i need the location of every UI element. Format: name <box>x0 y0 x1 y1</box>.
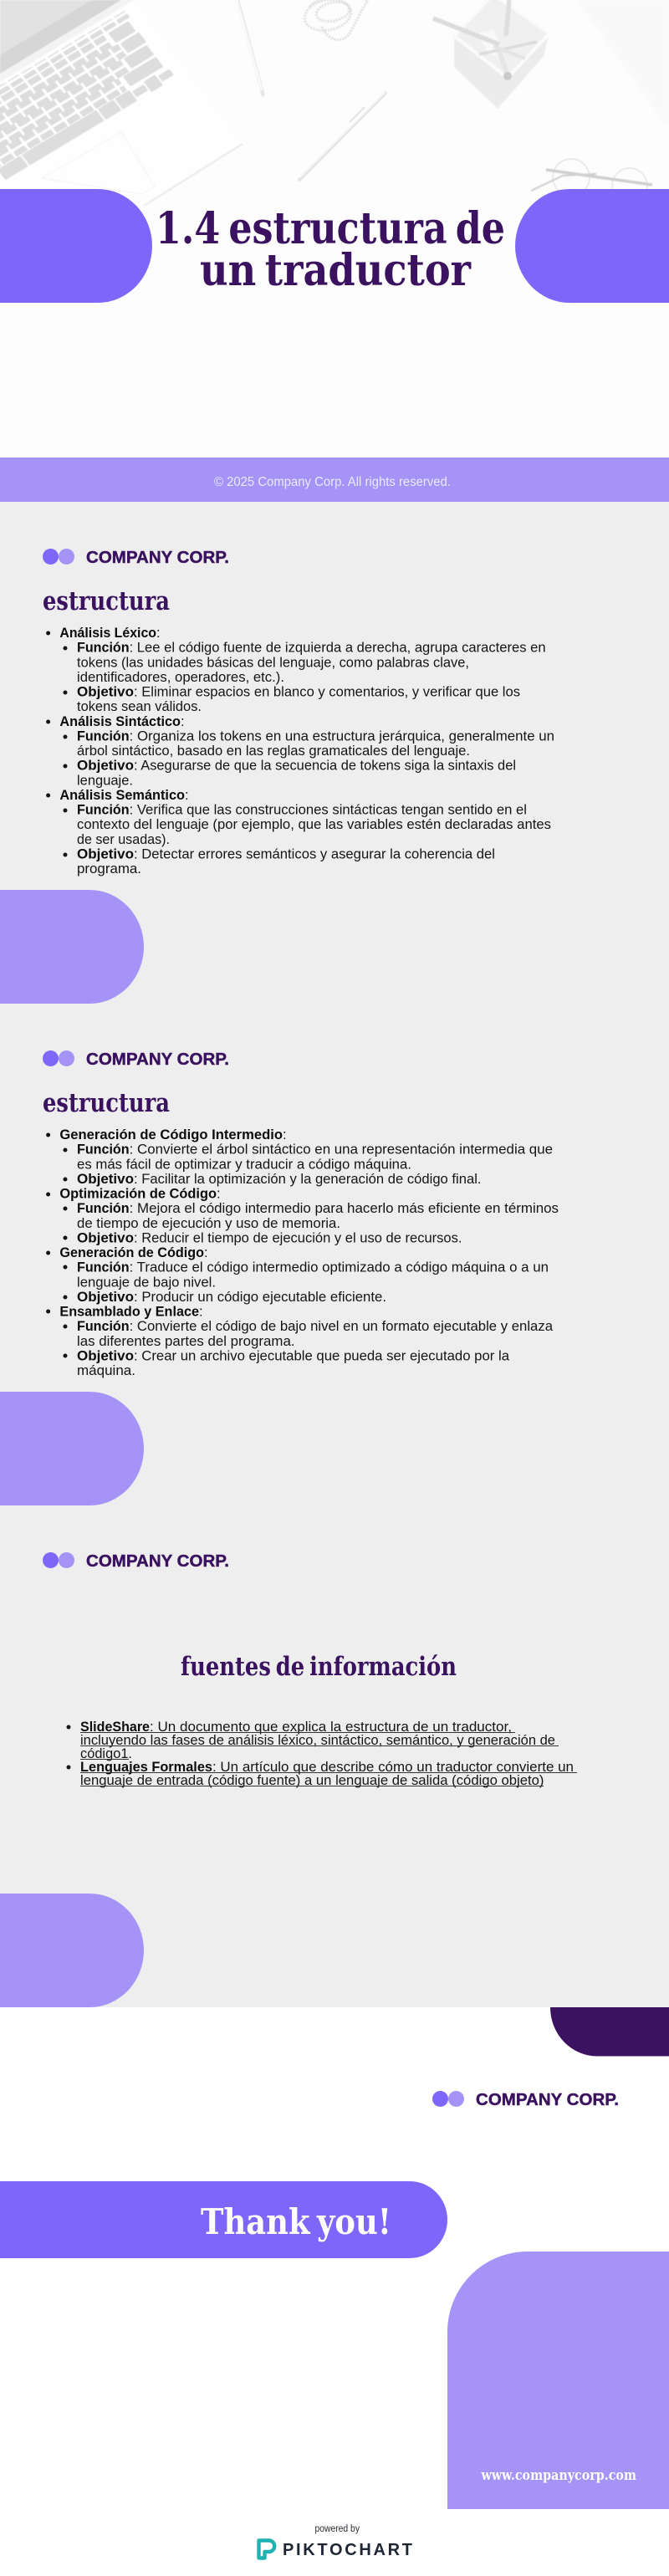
bullet list: lenguaje de bajo nivel. <box>77 1275 216 1290</box>
bullet list: : Mejora el código intermedio para hacerlo más eficiente en términos <box>130 1201 559 1216</box>
bullet list: árbol sintáctico, basado en las reglas gramaticales del lenguaje. <box>77 744 470 759</box>
bullet list: Objetivo <box>77 1172 134 1187</box>
sources list <box>67 1720 577 1788</box>
heading: fuentes de información <box>181 1652 457 1682</box>
sources list: SlideShare <box>80 1720 150 1735</box>
bullet list: contexto del lenguaje (por ejemplo, que las variables estén declaradas antes <box>77 817 551 832</box>
bullet list: máquina. <box>77 1363 135 1378</box>
panel: thank you <box>0 2007 669 2509</box>
glasses <box>530 158 652 192</box>
bullet list: lenguaje. <box>77 773 133 788</box>
copyright band: © 2025 Company Corp. All rights reserved. <box>214 475 451 489</box>
bullet list: : Facilitar la optimización y la generación de código final. <box>134 1172 482 1187</box>
bullet list: Análisis Sintáctico <box>59 714 181 729</box>
sources list: incluyendo las fases de análisis léxico, sintáctico, semántico, y generación de <box>80 1733 555 1748</box>
bullet list: Análisis Léxico <box>59 626 156 641</box>
bullet list: : <box>204 1245 208 1260</box>
bullet list: programa. <box>77 861 141 877</box>
thank you banner: Thank you! <box>201 2201 391 2242</box>
coiled cable <box>302 0 368 40</box>
sources list: Lenguajes Formales <box>80 1760 212 1775</box>
bullet list: tokens (las unidades básicas del lenguaje, como palabras clave, <box>77 655 469 670</box>
decorative pill <box>0 890 144 1004</box>
bullet list: : Reducir el tiempo de ejecución y el uso de recursos. <box>134 1230 462 1245</box>
heading: estructura <box>43 1088 170 1118</box>
bullet list: : <box>181 714 185 729</box>
pen top <box>237 0 263 96</box>
thank you banner <box>0 2181 447 2258</box>
logo: COMPANY CORP. <box>86 1552 229 1571</box>
bullet list: de ser usadas). <box>77 832 170 847</box>
decorative pill <box>0 1392 144 1505</box>
bullet list: Objetivo <box>77 759 134 774</box>
laptop <box>0 0 243 206</box>
pen holder <box>433 0 549 109</box>
left purple pill <box>0 189 152 303</box>
bullet list: : Producir un código ejecutable eficiente. <box>134 1290 386 1305</box>
bullet list: Función <box>77 1319 130 1334</box>
piktochart attribution: powered by <box>314 2524 360 2534</box>
bullet list: identificadores, operadores, etc.). <box>77 670 284 685</box>
bullet list: : Verifica que las construcciones sintácticas tengan sentido en el <box>130 803 527 818</box>
panel: content background <box>0 502 669 2007</box>
bullet list: Función <box>77 1201 130 1216</box>
heading: estructura <box>43 586 170 616</box>
sources list: código1. <box>80 1746 132 1761</box>
bullet list <box>46 626 554 877</box>
bullet list: : Organiza los tokens en una estructura jerárquica, generalmente un <box>130 728 554 744</box>
bullet list: Función <box>77 803 130 818</box>
pen middle <box>299 92 386 181</box>
bullet list: : Detectar errores semánticos y asegurar la coherencia del <box>134 846 495 861</box>
bullet list: es más fácil de optimizar y traducir a código máquina. <box>77 1157 411 1172</box>
bullet list: Generación de Código Intermedio <box>59 1127 283 1142</box>
sources list: lenguaje de entrada (código fuente) a un lenguaje de salida (código objeto) <box>80 1773 544 1788</box>
hero background desk photo <box>0 0 652 206</box>
bullet list: Análisis Semántico <box>59 788 185 803</box>
bullet list: Objetivo <box>77 1348 134 1363</box>
panel: hero <box>0 0 669 502</box>
logo: COMPANY CORP. <box>476 2091 619 2109</box>
piktochart attribution: PIKTOCHART <box>283 2541 412 2559</box>
bullet list: Objetivo <box>77 1230 134 1245</box>
bullet list: : <box>283 1127 287 1142</box>
bullet list: Ensamblado y Enlace <box>59 1305 199 1320</box>
bullet list: Objetivo <box>77 684 134 699</box>
panel: estructura 1 <box>0 549 554 1004</box>
bullet list: : Crear un archivo ejecutable que pueda ser ejecutado por la <box>134 1348 510 1363</box>
bullet list: : <box>156 626 161 641</box>
icon: piktochart logo mark <box>259 2541 274 2558</box>
title: 1.4 estructura de <box>156 203 505 254</box>
bullet list: Función <box>77 728 130 744</box>
bullet list <box>46 1127 559 1378</box>
bullet list: Optimización de Código <box>59 1186 217 1201</box>
bullet list: : Asegurarse de que la secuencia de tokens siga la sintaxis del <box>134 759 516 774</box>
title: un traductor <box>200 245 472 296</box>
bullet list: : <box>217 1186 221 1201</box>
bullet list: de tiempo de ejecución y uso de memoria. <box>77 1216 340 1231</box>
bullet list: las diferentes partes del programa. <box>77 1334 294 1349</box>
bullet list: Objetivo <box>77 1290 134 1305</box>
title <box>156 203 505 296</box>
piktochart attribution <box>259 2524 412 2559</box>
logo: COMPANY CORP. <box>86 1050 229 1069</box>
bullet list: : <box>185 788 189 803</box>
copyright band <box>0 457 669 502</box>
dark corner shape <box>550 2007 669 2056</box>
bullet list: : Convierte el código de bajo nivel en un formato ejecutable y enlaza <box>130 1319 554 1334</box>
bullet list: tokens sean válidos. <box>77 699 202 714</box>
bullet list: Generación de Código <box>59 1245 204 1260</box>
website panel: www.companycorp.com <box>481 2467 636 2483</box>
bullet list: : Traduce el código intermedio optimizado a código máquina o a un <box>130 1260 549 1275</box>
sources list: : Un artículo que describe cómo un traductor convierte un <box>212 1760 574 1775</box>
bullet list: : Lee el código fuente de izquierda a derecha, agrupa caracteres en <box>130 641 546 656</box>
panel: fuentes de información <box>0 1552 577 2007</box>
bullet list: Función <box>77 1142 130 1158</box>
bullet list: : Eliminar espacios en blanco y comentarios, y verificar que los <box>134 684 520 699</box>
panel: estructura 2 <box>0 1050 559 1505</box>
bullet list: : Convierte el árbol sintáctico en una representación intermedia que <box>130 1142 553 1158</box>
bullet list: : <box>199 1305 203 1320</box>
website panel <box>447 2251 669 2509</box>
panel: white closing background <box>0 2007 669 2576</box>
logo: COMPANY CORP. <box>86 549 229 567</box>
bullet list: Objetivo <box>77 846 134 861</box>
right purple pill <box>515 189 669 303</box>
decorative pill <box>0 1894 144 2007</box>
bullet list: Función <box>77 1260 130 1275</box>
sources list: : Un documento que explica la estructura de un traductor, <box>150 1720 512 1735</box>
bullet list: Función <box>77 641 130 656</box>
